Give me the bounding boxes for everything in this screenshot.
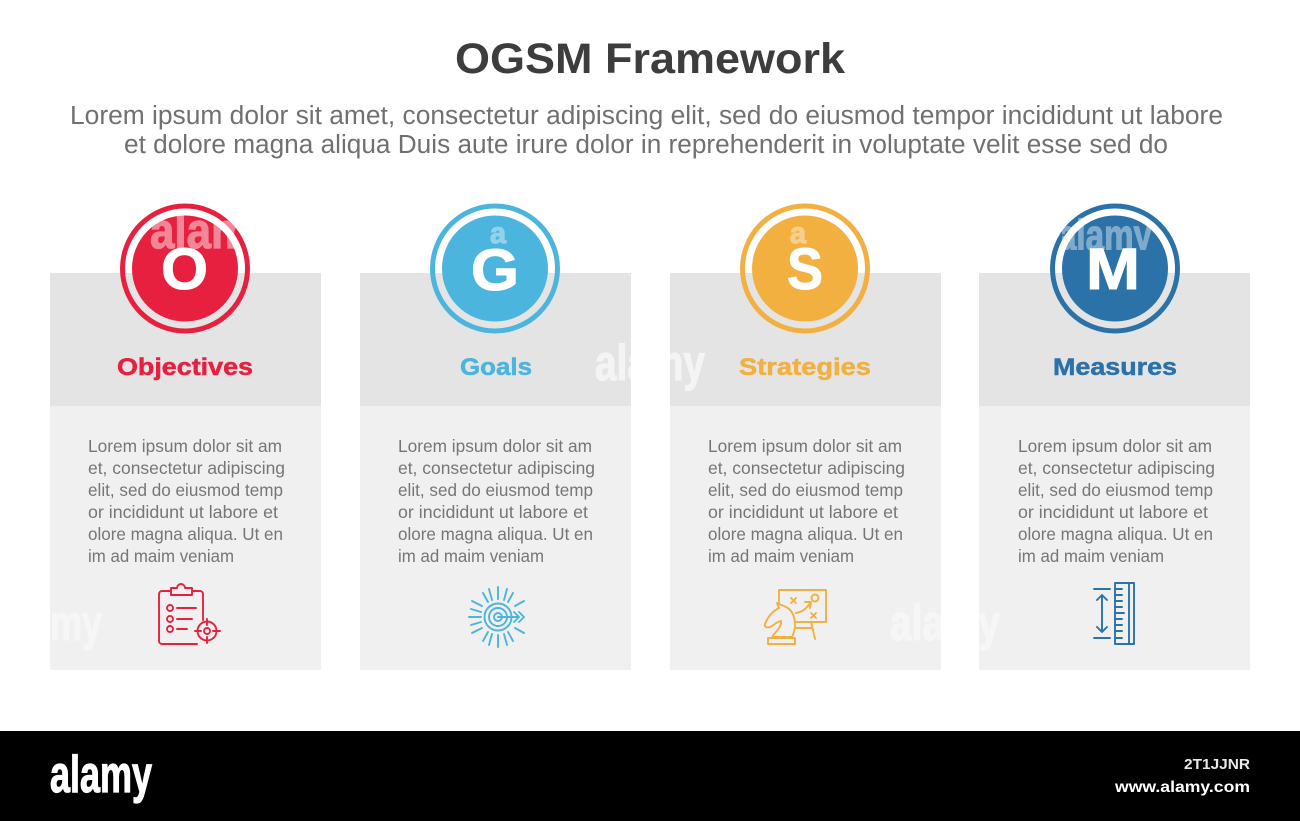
badge: O <box>122 203 250 331</box>
text block: objectives: olore magna aliqua. Ut en <box>88 524 283 544</box>
panel: strategies <box>670 206 941 670</box>
watermark: alamy overlays: my <box>50 595 102 651</box>
watermark: alamy overlays: alamy <box>890 595 1000 651</box>
footer: site url: www.alamy.com <box>1114 779 1250 796</box>
text block: objectives: or incididunt ut labore et <box>88 502 278 522</box>
text block: objectives <box>88 436 285 566</box>
footer: image id: 2T1JJNR <box>1184 757 1251 773</box>
text block: measures: Lorem ipsum dolor sit am <box>1018 436 1212 456</box>
text block: strategies: Lorem ipsum dolor sit am <box>708 436 902 456</box>
title: OGSM Framework <box>455 35 845 83</box>
text block: goals: olore magna aliqua. Ut en <box>398 524 593 544</box>
watermark: alamy overlays <box>50 335 1000 651</box>
text block: goals: im ad maim veniam <box>398 546 544 566</box>
icon: ruler with height arrow <box>1094 583 1134 644</box>
text block: strategies: et, consectetur adipiscing <box>708 458 905 478</box>
icon: chess knight and strategy board <box>765 590 826 644</box>
badge: S: a <box>790 217 806 250</box>
heading: strategies: Strategies <box>739 354 871 381</box>
text block: objectives: Lorem ipsum dolor sit am <box>88 436 282 456</box>
text block: goals: et, consectetur adipiscing <box>398 458 595 478</box>
heading: objectives: Objectives <box>117 354 253 381</box>
text block: strategies <box>708 436 905 566</box>
badge: M <box>1052 206 1178 331</box>
badge: G: a <box>490 217 506 250</box>
panel: objectives <box>50 203 321 670</box>
text block: goals: Lorem ipsum dolor sit am <box>398 436 592 456</box>
text block: measures <box>1018 436 1215 566</box>
badge: S: S <box>787 237 823 302</box>
subtitle text <box>70 102 1223 159</box>
text block: goals: or incididunt ut labore et <box>398 502 588 522</box>
badge: O: alam <box>150 203 250 259</box>
heading: goals: Goals <box>460 354 532 381</box>
subtitle text: Lorem ipsum dolor sit amet, consectetur adipiscing elit, sed do eiusmod tempor incididunt ut labore <box>70 102 1223 130</box>
panel: goals <box>360 206 631 670</box>
badge: S <box>742 206 868 331</box>
text block: goals: elit, sed do eiusmod temp <box>398 480 593 500</box>
watermark: alamy overlays: alamy <box>595 335 705 391</box>
icon: target with rays <box>469 587 524 647</box>
text block: measures: olore magna aliqua. Ut en <box>1018 524 1213 544</box>
text block: objectives: im ad maim veniam <box>88 546 234 566</box>
text block: measures: im ad maim veniam <box>1018 546 1164 566</box>
icon: clipboard with target <box>159 584 220 644</box>
panel: measures <box>979 206 1250 670</box>
text block: measures: elit, sed do eiusmod temp <box>1018 480 1213 500</box>
text block: objectives: et, consectetur adipiscing <box>88 458 285 478</box>
badge: M: alamy <box>1058 211 1152 260</box>
text block: strategies: elit, sed do eiusmod temp <box>708 480 903 500</box>
subtitle text: et dolore magna aliqua Duis aute irure dolor in reprehenderit in voluptate velit esse sed do <box>124 131 1168 159</box>
heading: measures: Measures <box>1053 354 1177 381</box>
text block: measures: or incididunt ut labore et <box>1018 502 1208 522</box>
text block: goals <box>398 436 595 566</box>
text block: strategies: or incididunt ut labore et <box>708 502 898 522</box>
footer: black bar <box>0 731 1300 821</box>
badge: G: G <box>471 238 519 303</box>
text block: strategies: im ad maim veniam <box>708 546 854 566</box>
text block: measures: et, consectetur adipiscing <box>1018 458 1215 478</box>
badge: G <box>432 206 558 331</box>
badge: M: M <box>1086 237 1140 302</box>
badge: O: O <box>161 237 208 302</box>
text block: objectives: elit, sed do eiusmod temp <box>88 480 283 500</box>
footer: alamy logo: alamy <box>50 746 152 804</box>
text block: strategies: olore magna aliqua. Ut en <box>708 524 903 544</box>
